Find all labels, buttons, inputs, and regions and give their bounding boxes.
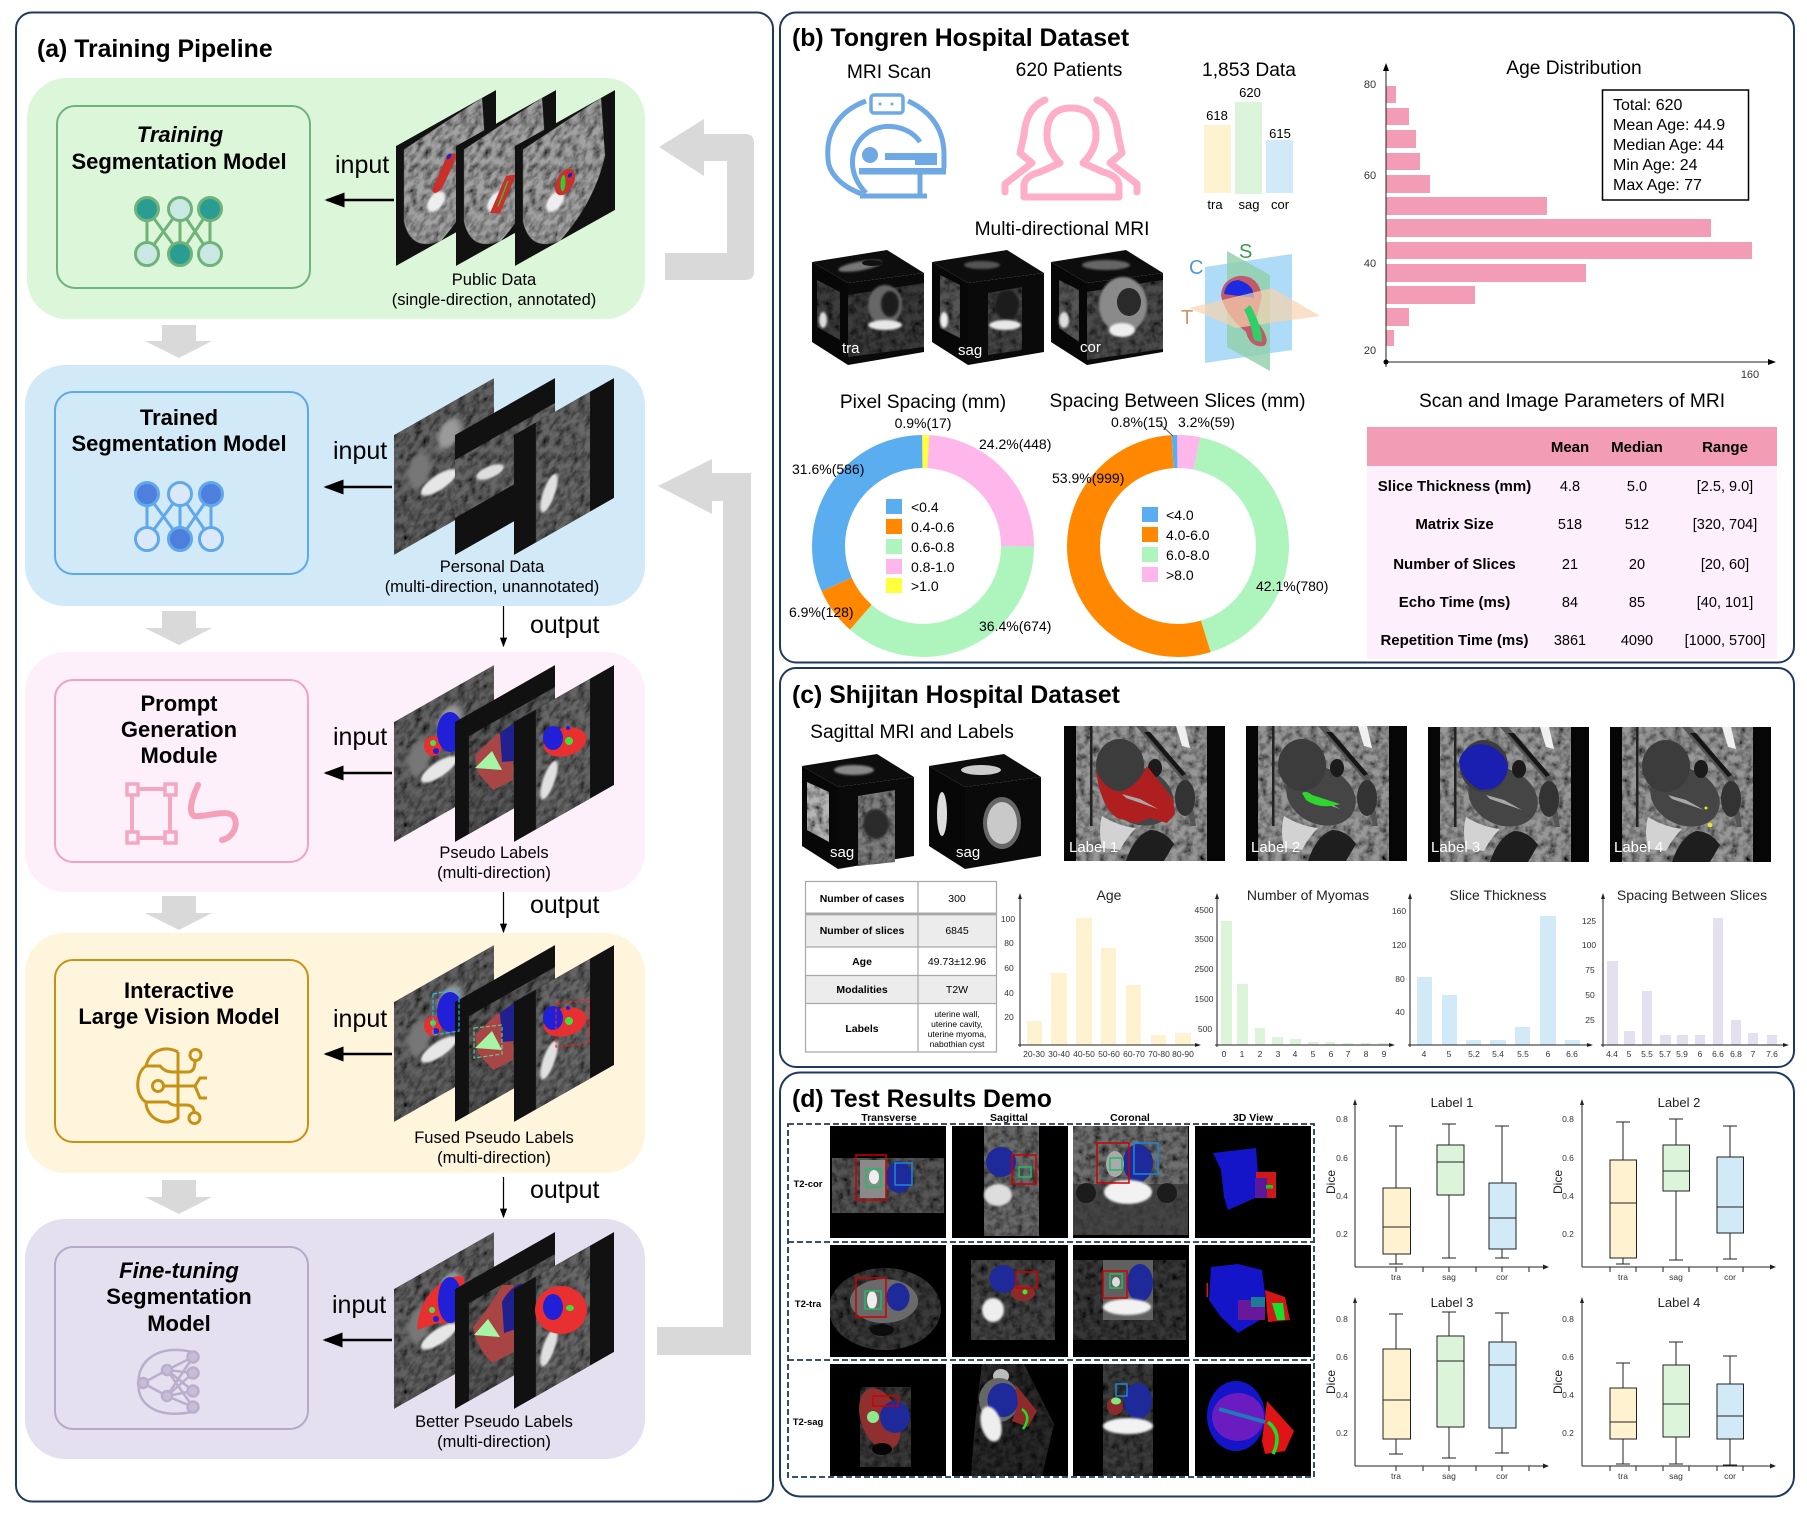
donut: spacing between slices: 53.9%(999): [1052, 470, 1124, 486]
chart: slice thickness: 160: [1392, 906, 1406, 916]
cube: sag: [932, 250, 1044, 365]
result grid: T2-sag: [830, 1364, 1311, 1476]
table: dataset summary: uterine cavity,: [931, 1019, 983, 1029]
boxplot: label 4: sag: [1669, 1471, 1683, 1481]
image: label 1: [1064, 726, 1225, 861]
legend: <4.0: [1166, 507, 1194, 523]
table: dataset summary: 300: [948, 893, 966, 905]
model card: Training: [137, 122, 224, 147]
chart: age distribution: Age Distribution: [1506, 58, 1642, 79]
input label: input: [333, 723, 387, 751]
boxplot: label 1: Label 1: [1431, 1095, 1473, 1110]
model card: [55, 392, 308, 574]
cube: tra: [812, 250, 924, 365]
chart: age: 40: [1004, 988, 1014, 998]
dashed frame: [788, 1124, 1314, 1477]
stats box: Median Age: 44: [1613, 137, 1724, 154]
table: MRI parameters: Repetition Time (ms): [1380, 632, 1529, 649]
chart: number of myomas: 500: [1198, 1024, 1212, 1034]
cube: label mask: [929, 754, 1041, 869]
diagram: anatomical planes: S: [1239, 241, 1252, 263]
boxplot: label 2: tra: [1618, 1272, 1628, 1282]
chart: slice thickness: 80: [1395, 974, 1405, 984]
cube: cor: cor: [1080, 339, 1101, 356]
boxplot: label 1: [1324, 1095, 1549, 1282]
cube: MRI: [802, 754, 914, 869]
panel: (d) test results demo: [780, 1072, 1794, 1496]
arrow: output 3: [502, 1177, 504, 1217]
MRI stack: public data: [396, 90, 615, 266]
chart: slice thickness: 6.6: [1566, 1049, 1578, 1059]
result grid: T2-tra: [829, 1245, 1311, 1357]
stage: training segmentation model: [27, 78, 645, 319]
chart: slice thickness: Slice Thickness: [1449, 887, 1547, 903]
stats box: Max Age: 77: [1613, 177, 1702, 194]
stats box: [1602, 90, 1748, 200]
input label: input: [335, 151, 389, 179]
stage: interactive large vision model: (multi-direction): [437, 1149, 551, 1167]
arrow: input: [327, 199, 394, 201]
chart: age: 70-80: [1148, 1049, 1170, 1059]
chart: number of myomas: 9: [1382, 1049, 1387, 1059]
table: dataset summary: 49.73±12.96: [928, 956, 986, 968]
stage: trained segmentation model: [25, 365, 645, 606]
column headers: Sagittal: [990, 1112, 1028, 1124]
table: MRI parameters: [20, 60]: [1701, 557, 1749, 573]
table: dataset summary: uterine wall,: [934, 1009, 980, 1019]
heading: training pipeline: (a) Training Pipeline: [37, 36, 273, 63]
MRI stack: pseudo labels: [394, 665, 614, 842]
chart: number of myomas: 5: [1311, 1049, 1316, 1059]
chart: spacing between slices: Spacing Between Slices: [1617, 887, 1767, 903]
chart: number of myomas: 4: [1293, 1049, 1298, 1059]
boxplot: label 1: sag: [1442, 1272, 1456, 1282]
diagram: anatomical planes: [1181, 241, 1320, 371]
label: MRI scan: MRI Scan: [847, 62, 931, 83]
label: data: 1,853 Data: [1202, 60, 1296, 81]
stats box: Total: 620: [1613, 97, 1682, 114]
boxplot: label 4: Dice: [1551, 1370, 1565, 1394]
table: MRI parameters: 5.0: [1627, 479, 1647, 495]
arrow: input: [326, 772, 392, 774]
boxplot: label 4: 0.2: [1562, 1428, 1574, 1438]
input label: input: [333, 437, 387, 465]
chart: slice thickness: [1392, 887, 1593, 1059]
table: dataset summary: Labels: [845, 1023, 879, 1035]
icon: box and scribble: [127, 784, 236, 843]
boxplot: label 2: 0.8: [1562, 1114, 1574, 1124]
MRI stack: better pseudo labels: [394, 1232, 614, 1409]
chart: number of myomas: 4500: [1195, 905, 1214, 915]
icon: circular network: [138, 1350, 198, 1414]
chart: spacing between slices: 125: [1582, 916, 1596, 926]
chart: spacing between slices: 7.6: [1766, 1049, 1778, 1059]
table: MRI parameters: Slice Thickness (mm): [1378, 478, 1531, 495]
model card: Generation: [121, 717, 237, 742]
chart: spacing between slices: 5.5: [1641, 1049, 1653, 1059]
chart: number of myomas: 3500: [1195, 934, 1214, 944]
caption: Better Pseudo Labels: [415, 1413, 573, 1431]
output label: output: [530, 611, 600, 639]
chart: age: 30-40: [1048, 1049, 1070, 1059]
stage: interactive large vision model: [25, 933, 645, 1173]
icon: network blue: [136, 482, 222, 550]
table: MRI parameters: [1367, 391, 1777, 659]
label: patients: 620 Patients: [1016, 60, 1122, 81]
boxplot: label 2: [1551, 1095, 1776, 1282]
icon: MRI scanner: [828, 95, 946, 197]
model card: [57, 106, 310, 288]
model card: Trained: [140, 405, 218, 430]
output label: output: [530, 891, 600, 919]
bar chart: direction counts: 618: [1206, 108, 1228, 123]
model card: [55, 1247, 308, 1429]
diagram: anatomical planes: C: [1189, 257, 1203, 279]
boxplot: label 4: [1551, 1295, 1776, 1481]
boxplot: label 3: tra: [1391, 1471, 1401, 1481]
legend: 0.8-1.0: [911, 559, 955, 575]
bar chart: direction counts: cor: [1271, 197, 1290, 212]
arrow: output 1: [502, 606, 504, 646]
stage: prompt generation module: [25, 652, 645, 892]
model card: Large Vision Model: [78, 1004, 280, 1029]
chart: spacing between slices: 6.8: [1730, 1049, 1742, 1059]
cube: cor: [1051, 250, 1163, 365]
chart: age distribution: [1364, 58, 1776, 381]
chart: spacing between slices: 50: [1585, 990, 1595, 1000]
donut: pixel spacing: [789, 392, 1051, 640]
donut: spacing between slices: 0.8%(15): [1111, 414, 1168, 430]
boxplot: label 2: 0.4: [1562, 1191, 1574, 1201]
boxplot: label 2: Dice: [1551, 1170, 1565, 1194]
donut: spacing between slices: 3.2%(59): [1178, 414, 1235, 430]
chart: slice thickness: 4: [1422, 1049, 1427, 1059]
image: label 4: Label 4: [1614, 839, 1663, 856]
label: multi-directional: Multi-directional MRI: [975, 219, 1149, 240]
chart: slice thickness: 6: [1546, 1049, 1551, 1059]
heading: test results: (d) Test Results Demo: [792, 1086, 1052, 1113]
arrow: input: [325, 1339, 392, 1341]
table: MRI parameters: Echo Time (ms): [1399, 594, 1510, 611]
boxplot: label 4: tra: [1618, 1471, 1628, 1481]
caption: Pseudo Labels: [439, 844, 549, 862]
table: MRI parameters: 85: [1629, 595, 1645, 611]
model card: Prompt: [140, 691, 218, 716]
image: label 2: [1246, 726, 1407, 861]
chart: slice thickness: 5.2: [1468, 1049, 1480, 1059]
boxplot: label 4: cor: [1724, 1471, 1736, 1481]
chart: age: 20-30: [1023, 1049, 1045, 1059]
chart: age: 80-90: [1172, 1049, 1194, 1059]
table: MRI parameters: Mean: [1551, 439, 1589, 456]
table: MRI parameters: Scan and Image Parameters of MRI: [1419, 391, 1725, 412]
boxplot: label 1: tra: [1391, 1272, 1401, 1282]
boxplot: label 2: cor: [1724, 1272, 1736, 1282]
model card: [55, 960, 308, 1142]
bar chart: direction counts: sag: [1239, 197, 1259, 212]
result grid: T2-cor: [830, 1126, 1311, 1238]
heading: shijitan: (c) Shijitan Hospital Dataset: [792, 682, 1120, 709]
boxplot: label 3: 0.2: [1336, 1428, 1348, 1438]
table: MRI parameters: Matrix Size: [1415, 516, 1494, 533]
chart: age distribution: 80: [1364, 79, 1376, 91]
column headers: 3D View: [1233, 1112, 1274, 1124]
row labels: T2-sag: [793, 1417, 824, 1428]
chart: number of myomas: 1500: [1195, 994, 1214, 1004]
chart: age: 60-70: [1123, 1049, 1145, 1059]
column headers: Coronal: [1110, 1112, 1150, 1124]
donut: pixel spacing: 0.9%(17): [895, 415, 951, 431]
panel: (a) training pipeline: [16, 12, 773, 1502]
boxplot: label 3: cor: [1496, 1471, 1508, 1481]
chart: spacing between slices: 4.4: [1606, 1049, 1618, 1059]
bar chart: direction counts: [1204, 85, 1293, 212]
table: dataset summary: Age: [852, 956, 872, 968]
chart: number of myomas: Number of Myomas: [1247, 887, 1369, 903]
boxplot: label 1: 0.4: [1336, 1191, 1348, 1201]
chart: spacing between slices: 25: [1585, 1015, 1595, 1025]
table: MRI parameters: 21: [1562, 557, 1578, 573]
boxplot: label 1: cor: [1496, 1272, 1508, 1282]
chart: number of myomas: 0: [1222, 1049, 1227, 1059]
boxplot: label 3: [1324, 1295, 1549, 1481]
chart: spacing between slices: [1582, 887, 1789, 1059]
chart: spacing between slices: 7: [1751, 1049, 1756, 1059]
table: MRI parameters: 3861: [1554, 633, 1586, 649]
panel: (b) tongren hospital dataset: [780, 12, 1794, 662]
image: label 3: [1428, 727, 1589, 862]
chart: age: 60: [1004, 963, 1014, 973]
boxplot: label 2: Label 2: [1658, 1095, 1700, 1110]
boxplot: label 1: 0.2: [1336, 1229, 1348, 1239]
row labels: T2-cor: [793, 1179, 823, 1190]
table: MRI parameters: [2.5, 9.0]: [1697, 479, 1753, 495]
legend: >8.0: [1166, 567, 1194, 583]
boxplot: label 3: Dice: [1324, 1370, 1338, 1394]
row labels: [793, 1179, 824, 1428]
boxplot: label 2: 0.2: [1562, 1229, 1574, 1239]
boxplot: label 2: 0.6: [1562, 1153, 1574, 1163]
column headers: [861, 1112, 1274, 1124]
arrow: down 2: [145, 611, 212, 645]
feedback arrow top: [659, 119, 754, 280]
image: label 2: Label 2: [1251, 839, 1300, 856]
legend: 0.4-0.6: [911, 519, 955, 535]
chart: number of myomas: 8: [1364, 1049, 1369, 1059]
table: MRI parameters: 84: [1562, 595, 1578, 611]
arrow: input: [326, 486, 392, 488]
diagram: anatomical planes: T: [1181, 307, 1193, 329]
table: MRI parameters: 4090: [1621, 633, 1653, 649]
column headers: Transverse: [861, 1112, 917, 1124]
MRI stack: fused pseudo labels: [394, 945, 614, 1122]
input label: input: [333, 1005, 387, 1033]
donut: pixel spacing: 24.2%(448): [979, 436, 1051, 452]
chart: slice thickness: 120: [1392, 940, 1406, 950]
heading: tongren: (b) Tongren Hospital Dataset: [792, 25, 1129, 52]
table: MRI parameters: Range: [1702, 439, 1748, 456]
boxplot: label 4: 0.8: [1562, 1314, 1574, 1324]
chart: spacing between slices: 5.9: [1676, 1049, 1688, 1059]
chart: spacing between slices: 5: [1627, 1049, 1632, 1059]
row labels: T2-tra: [795, 1299, 822, 1310]
model card: Segmentation Model: [71, 431, 287, 456]
model card: Segmentation Model: [71, 149, 287, 174]
donut: spacing between slices: [1050, 391, 1328, 640]
stage: fine-tuning segmentation model: [25, 1219, 645, 1459]
caption: Public Data: [452, 271, 537, 289]
arrow: input: [326, 1053, 392, 1055]
chart: slice thickness: 5.4: [1492, 1049, 1504, 1059]
table: dataset summary: Number of cases: [820, 893, 904, 905]
model card: Module: [140, 743, 218, 768]
model card: [55, 680, 308, 862]
boxplot: label 4: 0.4: [1562, 1390, 1574, 1400]
chart: number of myomas: 6: [1329, 1049, 1334, 1059]
icon: patients: [1005, 100, 1137, 197]
chart: number of myomas: 2500: [1195, 964, 1214, 974]
boxplot: label 3: Label 3: [1431, 1295, 1473, 1310]
stage: training segmentation model: (single-direction, annotated): [392, 291, 596, 309]
donut: pixel spacing: 31.6%(586): [792, 461, 864, 477]
table: MRI parameters: 512: [1625, 517, 1649, 533]
cube: sag: sag: [958, 342, 982, 359]
table: MRI parameters: [40, 101]: [1697, 595, 1753, 611]
donut: spacing between slices: 42.1%(780): [1256, 578, 1328, 594]
table: MRI parameters: Median: [1611, 439, 1663, 456]
table: dataset summary: Number of slices: [820, 925, 904, 937]
image: label 3: Label 3: [1431, 839, 1480, 856]
MRI stack: personal data: [394, 378, 614, 555]
chart: slice thickness: 5: [1447, 1049, 1452, 1059]
boxplot: label 3: 0.8: [1336, 1314, 1348, 1324]
feedback arrow long: [657, 459, 751, 1355]
arrow: down 3: [145, 896, 212, 930]
boxplot: label 4: 0.6: [1562, 1352, 1574, 1362]
chart: age: 50-60: [1098, 1049, 1120, 1059]
model card: Fine-tuning: [119, 1258, 239, 1283]
cube: label mask: sag: [956, 844, 980, 861]
boxplot: label 3: 0.6: [1336, 1352, 1348, 1362]
bar chart: direction counts: 615: [1269, 126, 1291, 141]
chart: spacing between slices: 5.7: [1659, 1049, 1671, 1059]
icon: brain circuit: [138, 1049, 207, 1124]
boxplot: label 2: sag: [1669, 1272, 1683, 1282]
arrow: output 2: [502, 892, 504, 932]
chart: age distribution: 60: [1364, 170, 1376, 182]
table: MRI parameters: Number of Slices: [1393, 556, 1516, 573]
table: dataset summary: Modalities: [836, 984, 888, 996]
legend: [886, 499, 955, 594]
donut: spacing between slices: Spacing Between Slices (mm): [1050, 391, 1305, 412]
label: sagittal MRI and labels: Sagittal MRI and Labels: [810, 722, 1014, 743]
legend: >1.0: [911, 578, 939, 594]
chart: age: Age: [1097, 887, 1122, 903]
stage: trained segmentation model: (multi-direction, unannotated): [385, 578, 599, 596]
caption: Fused Pseudo Labels: [414, 1129, 574, 1147]
arrow: down 1: [145, 325, 212, 358]
chart: spacing between slices: 100: [1582, 940, 1596, 950]
model card: Model: [147, 1311, 211, 1336]
table: MRI parameters: [1000, 5700]: [1685, 633, 1765, 649]
output label: output: [530, 1176, 600, 1204]
donut: pixel spacing: Pixel Spacing (mm): [840, 392, 1006, 413]
chart: slice thickness: 5.5: [1517, 1049, 1529, 1059]
chart: slice thickness: 40: [1395, 1007, 1405, 1017]
bar chart: direction counts: 620: [1239, 85, 1261, 100]
table: dataset summary: nabothian cyst: [930, 1039, 985, 1049]
caption: Personal Data: [440, 558, 545, 576]
chart: age distribution: 40: [1364, 258, 1376, 270]
boxplot: label 4: Label 4: [1658, 1295, 1700, 1310]
table: dataset summary: 6845: [945, 925, 969, 937]
chart: number of myomas: 3: [1276, 1049, 1281, 1059]
table: MRI parameters: 20: [1629, 557, 1645, 573]
legend: 4.0-6.0: [1166, 527, 1210, 543]
chart: spacing between slices: 6: [1698, 1049, 1703, 1059]
chart: age: 80: [1004, 938, 1014, 948]
stats box: Mean Age: 44.9: [1613, 117, 1725, 134]
cube: tra: tra: [842, 340, 860, 357]
chart: spacing between slices: 75: [1585, 965, 1595, 975]
table: dataset summary: uterine myoma,: [928, 1029, 986, 1039]
boxplot: label 3: 0.4: [1336, 1390, 1348, 1400]
image: label 1: Label 1: [1069, 839, 1118, 856]
legend: [1142, 507, 1210, 583]
chart: age distribution: 20: [1364, 345, 1376, 357]
chart: number of myomas: 1: [1240, 1049, 1245, 1059]
table: dataset summary: [805, 881, 997, 1052]
table: MRI parameters: 4.8: [1560, 479, 1580, 495]
boxplot: label 1: Dice: [1324, 1170, 1338, 1194]
model card: Segmentation: [106, 1284, 252, 1309]
table: MRI parameters: 518: [1558, 517, 1582, 533]
legend: 0.6-0.8: [911, 539, 955, 555]
panel: (c) shijitan hospital dataset: [780, 668, 1794, 1067]
chart: age: 20: [1004, 1012, 1014, 1022]
chart: age: [1001, 887, 1201, 1059]
arrow: down 4: [145, 1180, 212, 1214]
cube: MRI: sag: [830, 844, 854, 861]
bar chart: direction counts: tra: [1207, 197, 1223, 212]
icon: network green: [136, 198, 222, 266]
legend: 6.0-8.0: [1166, 547, 1210, 563]
image: label 4: [1610, 727, 1771, 862]
chart: number of myomas: 2: [1258, 1049, 1263, 1059]
boxplot: label 1: 0.8: [1336, 1114, 1348, 1124]
donut: pixel spacing: 6.9%(128): [789, 604, 854, 620]
chart: spacing between slices: 6.6: [1712, 1049, 1724, 1059]
chart: age distribution: 160: [1741, 369, 1759, 381]
input label: input: [332, 1291, 386, 1319]
stage: prompt generation module: (multi-direction): [437, 864, 551, 882]
model card: Interactive: [124, 978, 234, 1003]
stage: fine-tuning segmentation model: (multi-direction): [437, 1433, 551, 1451]
chart: age: 100: [1001, 914, 1015, 924]
chart: age: 40-50: [1073, 1049, 1095, 1059]
stats box: Min Age: 24: [1613, 157, 1698, 174]
legend: <0.4: [911, 499, 939, 515]
table: dataset summary: T2W: [946, 984, 968, 996]
boxplot: label 3: sag: [1442, 1471, 1456, 1481]
chart: number of myomas: [1195, 887, 1395, 1059]
table: MRI parameters: [320, 704]: [1693, 517, 1757, 533]
boxplot: label 1: 0.6: [1336, 1153, 1348, 1163]
chart: number of myomas: 7: [1346, 1049, 1351, 1059]
donut: pixel spacing: 36.4%(674): [979, 618, 1051, 634]
